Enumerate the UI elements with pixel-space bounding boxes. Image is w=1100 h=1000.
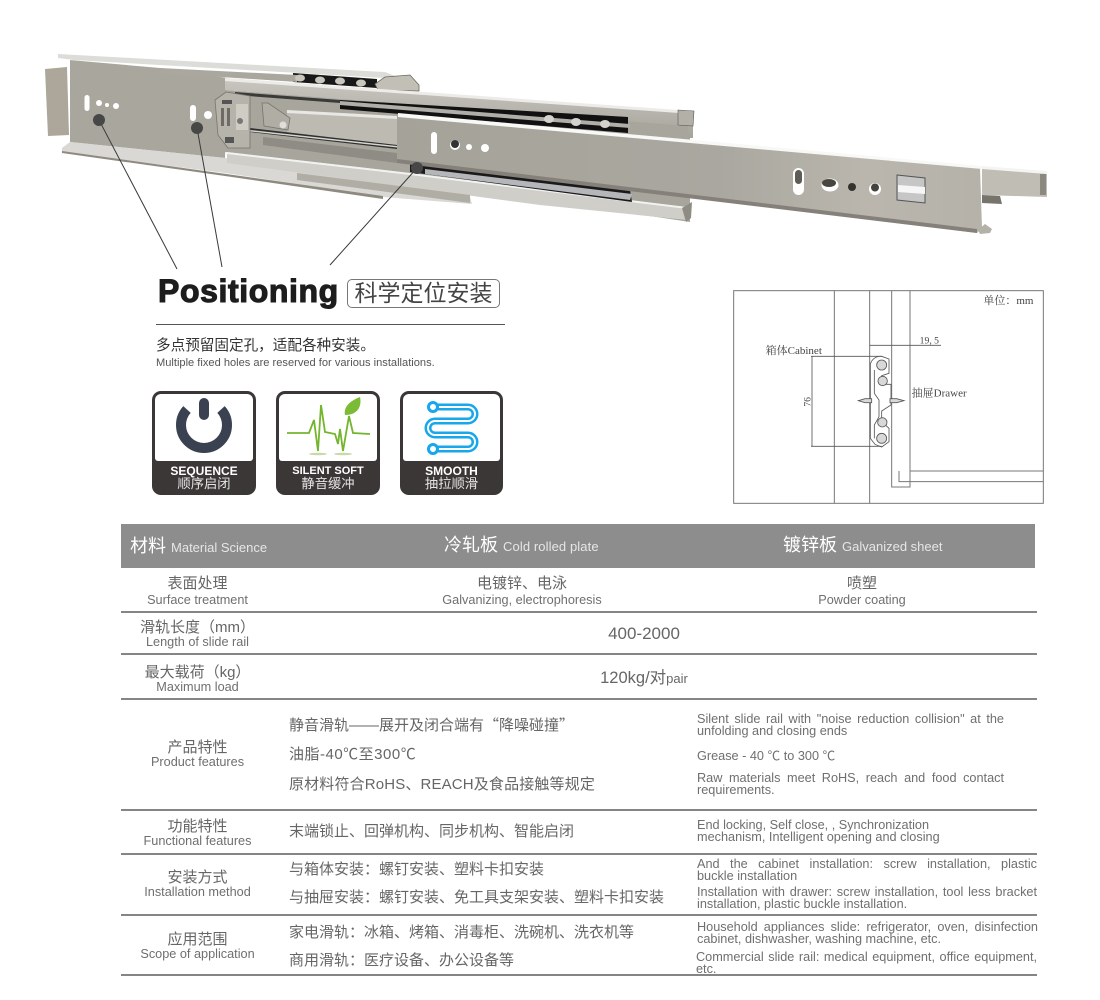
row: installation method (121, 857, 1037, 916)
icon: power symbol (176, 398, 232, 453)
row: scope of application: 商用滑轨：医疗设备、办公设备等 (289, 952, 514, 969)
row rule (121, 914, 1037, 916)
row: product features: Grease - 40 ℃ to 300 ℃ (697, 749, 835, 763)
row: functional features (121, 818, 1037, 855)
header cell: material: 材料 Material Science (130, 536, 267, 556)
outer rail (45, 54, 472, 204)
row: maximum load (121, 664, 1037, 700)
label: Functional features (144, 834, 251, 848)
label: smooth: 抽拉顺滑 (425, 476, 478, 491)
row: scope of application (121, 920, 1038, 976)
label: sequence: SEQUENCE (170, 464, 238, 478)
label (151, 739, 244, 769)
label: 安装方式 (167, 869, 228, 886)
value: galvanized (818, 575, 906, 607)
row: product features: 油脂-40℃至300℃ (289, 746, 416, 763)
value: cold rolled: Galvanizing, electrophoresis (442, 593, 602, 607)
label: Length of slide rail (146, 635, 249, 649)
label: 滑轨长度（mm） (140, 619, 255, 636)
label: silent soft: SILENT SOFT (292, 465, 364, 477)
value: cold rolled: 电镀锌、电泳 (477, 575, 567, 592)
label: Surface treatment (147, 593, 248, 607)
label: Maximum load (156, 680, 239, 694)
bracket and lever (215, 92, 290, 148)
row rule (121, 611, 1037, 613)
row: product features: 原材料符合RoHS、REACH及食品接触等规定 (289, 776, 595, 793)
label (140, 931, 255, 961)
row: rail length (121, 619, 1037, 655)
label (144, 869, 251, 899)
icon card: silent soft (276, 391, 380, 495)
icon: green waveform with leaf (287, 397, 370, 456)
heading badge: Chinese title: 科学定位安装 (354, 280, 492, 306)
label: 最大载荷（kg） (145, 664, 250, 681)
intro text: Chinese: 多点预留固定孔，适配各种安装。 (156, 338, 375, 354)
header cell: galvanized: 镀锌板 Galvanized sheet (783, 535, 942, 555)
label (140, 619, 255, 649)
label (145, 664, 250, 694)
value: cold rolled (442, 575, 602, 607)
label: 功能特性 (167, 818, 228, 835)
label: Installation method (144, 885, 251, 899)
label: 产品特性 (167, 739, 228, 756)
icon card: smooth (400, 391, 503, 495)
heading: Positioning: Positioning (158, 273, 339, 309)
label: Scope of application (140, 947, 255, 961)
label: smooth (425, 464, 478, 491)
intro text: English: Multiple fixed holes are reserved for various installations. (156, 357, 435, 369)
label: 应用范围 (167, 931, 228, 948)
Chinese install: 与箱体安装：螺钉安装、塑料卡扣安装 (289, 861, 544, 878)
drawing labels: 19, 5 (920, 335, 939, 346)
value: galvanized: Powder coating (818, 593, 906, 607)
Chinese functions: 末端锁止、回弹机构、同步机构、智能启闭 (289, 823, 574, 840)
drawing labels: 箱体Cabinet (766, 343, 822, 357)
heading rule (156, 324, 505, 325)
callout leader lines and dots (93, 114, 423, 269)
inner rail (397, 113, 1047, 234)
label: 表面处理 (167, 575, 228, 592)
row: scope of application: etc. (696, 962, 716, 976)
row: installation method: Installation with drawer: screw installation, tool less bracket (697, 885, 1037, 899)
row rule (121, 974, 1037, 976)
Chinese features: 静音滑轨——展开及闭合端有“降噪碰撞” (289, 714, 574, 735)
icon: blue serpentine pipe (424, 401, 478, 455)
row: scope of application: Commercial slide rail: medical equipment, office equipment, (696, 950, 1037, 964)
row: product features: unfolding and closing ends (697, 724, 847, 738)
row rule (121, 809, 1037, 811)
row rule (121, 853, 1037, 855)
English functions: End locking, Self close, , Synchronization (697, 818, 929, 832)
illustration: three-section slide rail with positioning callouts (45, 54, 1047, 270)
middle rail (225, 78, 694, 222)
row: product features (121, 712, 1037, 811)
row: surface treatment (121, 575, 1037, 613)
row: product features: requirements. (697, 783, 775, 797)
English install: And the cabinet installation: screw installation, plastic (697, 857, 1037, 871)
row: installation method: buckle installation (697, 869, 797, 883)
value: 120kg/对pair (600, 669, 688, 687)
drawing labels: 抽屉Drawer (912, 385, 967, 399)
icon card: sequence (152, 391, 256, 495)
row: functional features: mechanism, Intelligent opening and closing (697, 830, 940, 844)
row: installation method: installation, plastic buckle installation. (697, 897, 907, 911)
table header bar (121, 524, 1035, 568)
drawing labels (766, 294, 1034, 407)
label: silent soft: 静音缓冲 (301, 476, 355, 491)
row: installation method: 与抽屉安装：螺钉安装、免工具支架安装、塑料卡扣安装 (289, 889, 664, 906)
drawing labels: 单位：mm (983, 294, 1034, 307)
row rule (121, 653, 1037, 655)
header cell: cold rolled: 冷轧板 Cold rolled plate (444, 535, 599, 555)
label: sequence (170, 464, 238, 491)
label (147, 575, 248, 607)
installation dimension drawing (733, 290, 1044, 504)
value: 400-2000 (608, 624, 680, 643)
row rule (121, 698, 1037, 700)
label: smooth: SMOOTH (425, 464, 478, 478)
drawing labels: 76 (803, 397, 814, 407)
row: product features: Raw materials meet RoHS, reach and food contact (697, 771, 1004, 785)
Chinese scope: 家电滑轨：冰箱、烤箱、消毒柜、洗碗机、洗衣机等 (289, 924, 634, 941)
label: silent soft (292, 465, 364, 491)
English features: Silent slide rail with "noise reduction collision" at the (697, 712, 1004, 726)
English scope: Household appliances slide: refrigerator, oven, disinfection (697, 920, 1038, 934)
row: scope of application: cabinet, dishwasher, washing machine, etc. (697, 932, 941, 946)
label: Product features (151, 755, 244, 769)
label: sequence: 顺序启闭 (177, 476, 231, 491)
label (144, 818, 251, 848)
value: galvanized: 喷塑 (847, 575, 877, 592)
